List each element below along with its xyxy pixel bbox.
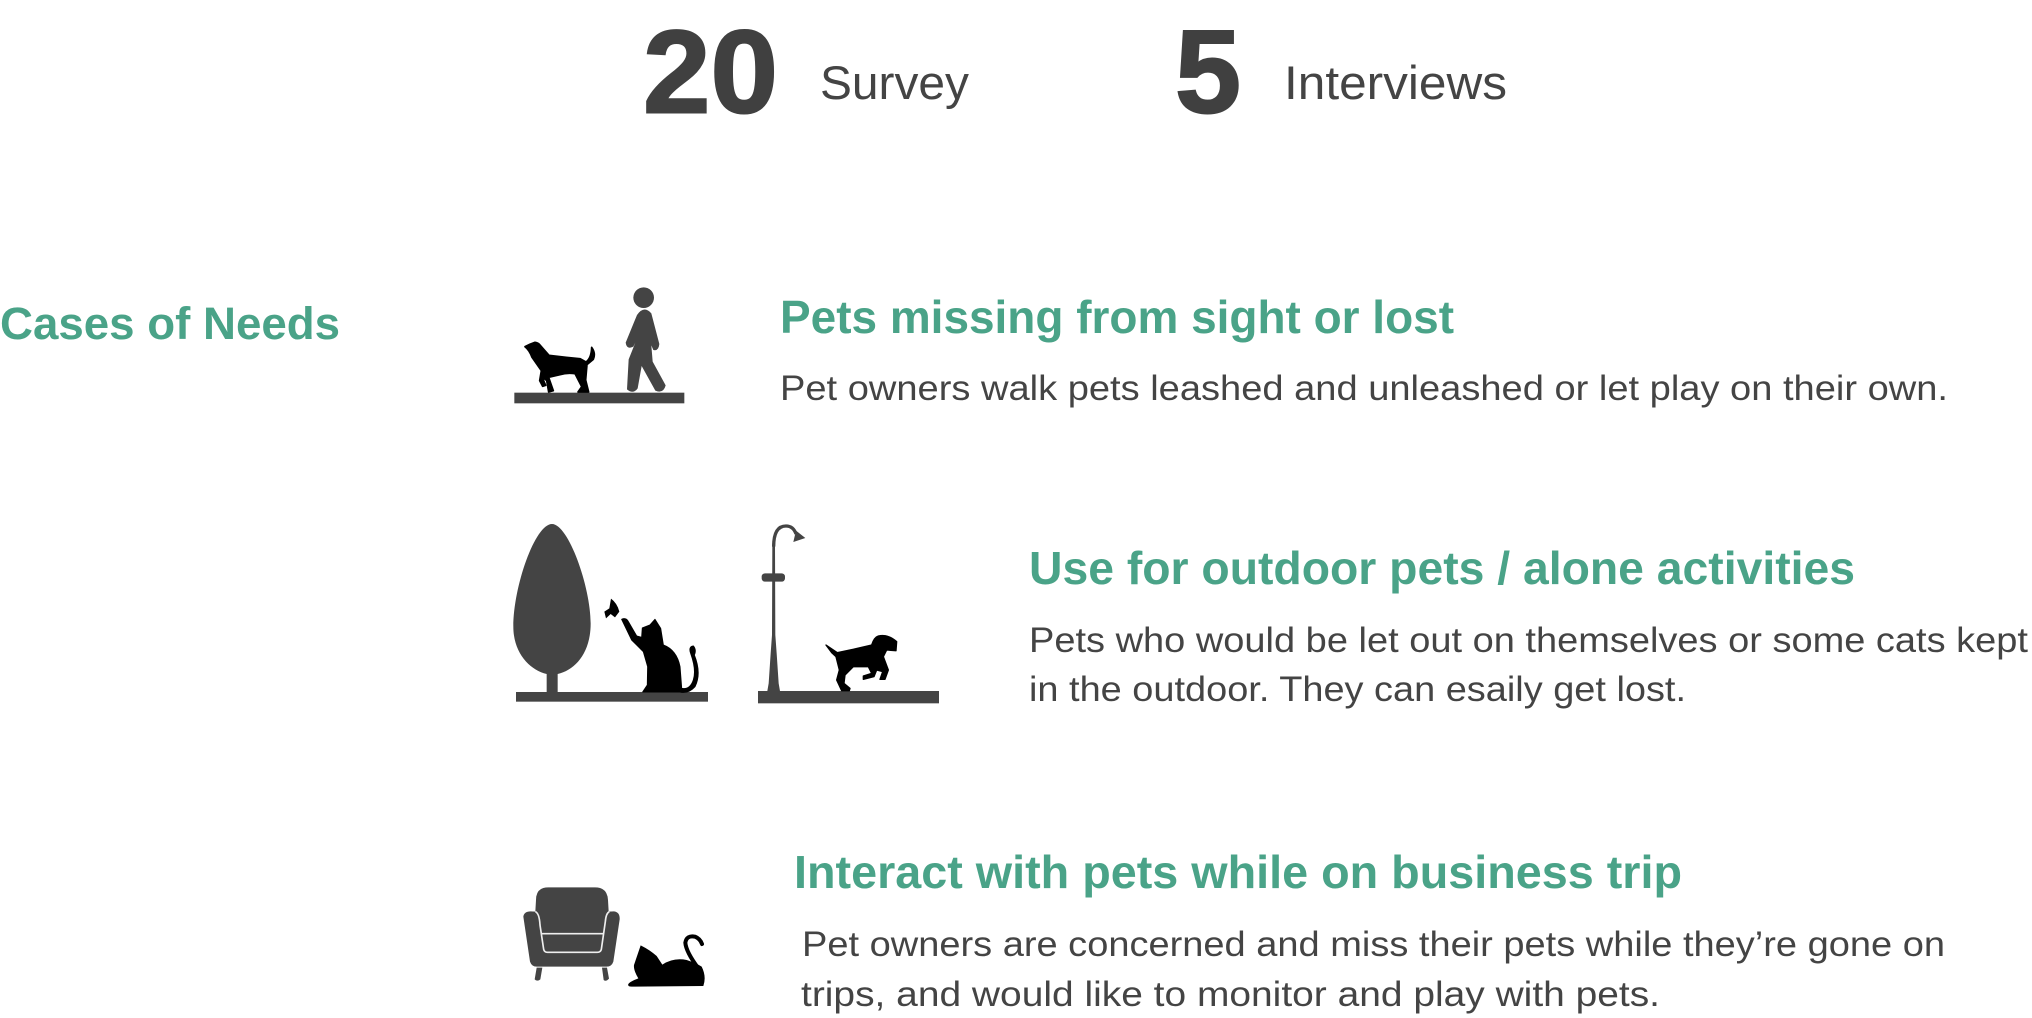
body text: business trip: Pet owners are concerned and miss their pets while they’re gone on — [802, 924, 1945, 964]
heading: business trip: Interact with pets while on business trip — [794, 846, 1682, 898]
stat: 20 survey: 20 — [643, 6, 778, 138]
icon: dog and person walking — [514, 287, 684, 403]
body text: outdoor pets: in the outdoor. They can esaily get lost. — [1029, 669, 1686, 709]
icon: street lamp and running dog — [758, 526, 939, 703]
stat: 5 interviews — [1175, 6, 1507, 138]
body text: pets missing: Pet owners walk pets leashed and unleashed or let play on their own. — [780, 368, 1948, 408]
body text: business trip — [801, 924, 1945, 1014]
body text: outdoor pets: Pets who would be let out on themselves or some cats kept — [1029, 620, 2028, 660]
section heading: cases of needs: Cases of Needs — [0, 298, 340, 349]
icon: tree, cat and butterfly — [513, 524, 708, 702]
stat: 20 survey: Survey — [820, 56, 970, 109]
stat: 5 interviews: Interviews — [1284, 56, 1507, 109]
body text: business trip: trips, and would like to monitor and play with pets. — [801, 974, 1660, 1014]
heading: pets missing: Pets missing from sight or lost — [780, 291, 1454, 343]
body text: outdoor pets — [1029, 620, 2028, 709]
heading: outdoor pets: Use for outdoor pets / alone activities — [1029, 542, 1855, 594]
stat: 20 survey — [643, 6, 970, 138]
stat: 5 interviews: 5 — [1175, 6, 1241, 138]
icon: armchair and lying cat — [523, 887, 705, 987]
